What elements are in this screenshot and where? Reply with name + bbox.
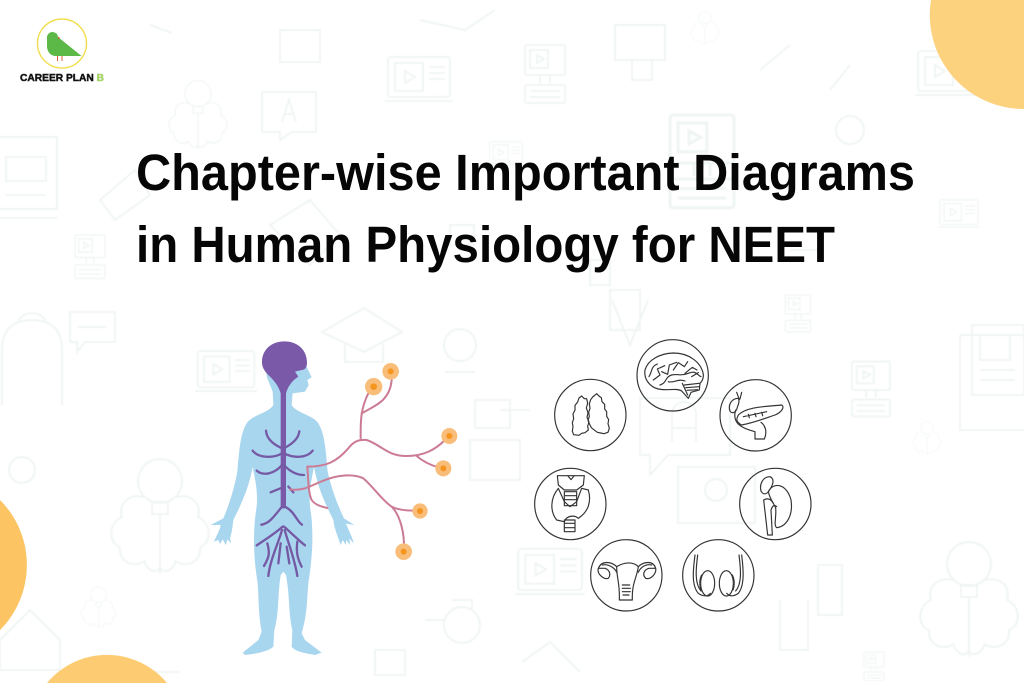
nerve branches [253, 431, 313, 576]
peripheral nerves [290, 380, 445, 543]
organ: testes [683, 540, 754, 611]
organ: kidney [740, 468, 811, 540]
organ: lungs [555, 379, 626, 451]
logo: Career Plan B [20, 19, 104, 84]
body silhouette [211, 355, 354, 655]
icon: green bird in yellow ring [38, 19, 86, 68]
organ: thyroid [535, 468, 606, 540]
nerve endings [365, 363, 457, 560]
organ: pancreas [720, 380, 791, 451]
organ: brain [637, 340, 708, 411]
decoration: top right circle [930, 0, 1024, 109]
title [136, 144, 915, 273]
title line 2: in Human Physiology for NEET [136, 216, 835, 273]
illustration: organ circles [535, 340, 811, 611]
logo wordmark: CAREER PLAN B [20, 73, 104, 84]
organ: uterus [591, 540, 662, 611]
decoration: left circle [0, 500, 27, 630]
illustration: human nervous system [211, 341, 457, 655]
title line 1: Chapter-wise Important Diagrams [136, 144, 915, 201]
decoration: bottom circle [47, 655, 167, 683]
brain and spinal cord [262, 341, 307, 508]
